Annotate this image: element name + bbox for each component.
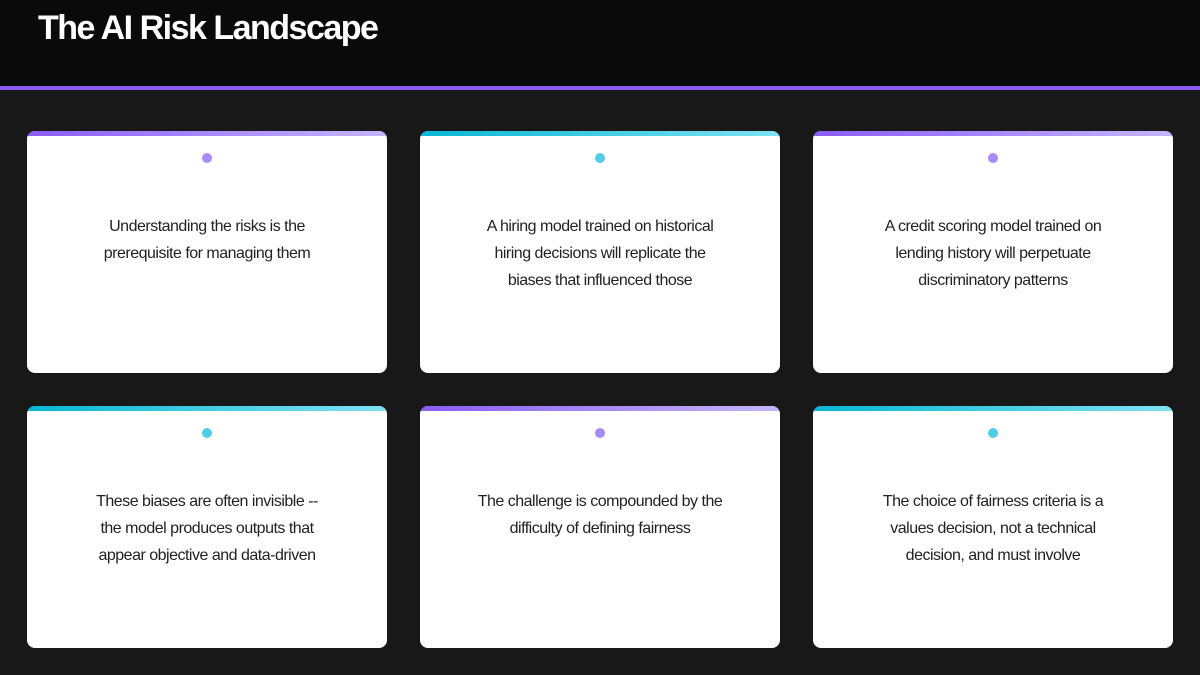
text: A credit scoring model trained on bbox=[885, 218, 1101, 235]
text bbox=[486, 218, 713, 289]
text: decision, and must involve bbox=[906, 547, 1080, 564]
icon: dot bbox=[595, 428, 605, 438]
icon: dot bbox=[988, 428, 998, 438]
card 4 bbox=[27, 406, 387, 648]
text bbox=[104, 218, 310, 262]
text: A hiring model trained on historical bbox=[487, 218, 713, 235]
text: discriminatory patterns bbox=[918, 272, 1068, 289]
text bbox=[884, 218, 1101, 289]
text: These biases are often invisible -- bbox=[96, 493, 318, 510]
text: The challenge is compounded by the bbox=[478, 493, 722, 510]
header band bbox=[0, 0, 1200, 86]
card 6 bbox=[813, 406, 1173, 648]
icon: dot bbox=[595, 153, 605, 163]
text: Understanding the risks is the bbox=[109, 218, 305, 235]
text: appear objective and data-driven bbox=[98, 547, 316, 564]
text: hiring decisions will replicate the bbox=[494, 245, 706, 262]
title: The AI Risk Landscape bbox=[38, 9, 377, 47]
header rule bbox=[0, 86, 1200, 90]
text bbox=[478, 493, 722, 537]
text: values decision, not a technical bbox=[890, 520, 1096, 537]
card 3 bbox=[813, 131, 1173, 373]
text: biases that influenced those bbox=[508, 272, 692, 289]
icon: dot bbox=[988, 153, 998, 163]
card 2 bbox=[420, 131, 780, 373]
text: lending history will perpetuate bbox=[895, 245, 1091, 262]
text: the model produces outputs that bbox=[100, 520, 314, 537]
text bbox=[883, 493, 1104, 564]
icon: dot bbox=[202, 153, 212, 163]
text: The choice of fairness criteria is a bbox=[883, 493, 1103, 510]
card 1 bbox=[27, 131, 387, 373]
icon: dot bbox=[202, 428, 212, 438]
text: prerequisite for managing them bbox=[104, 245, 310, 262]
text bbox=[96, 493, 318, 564]
card 5 bbox=[420, 406, 780, 648]
text: difficulty of defining fairness bbox=[510, 520, 690, 537]
